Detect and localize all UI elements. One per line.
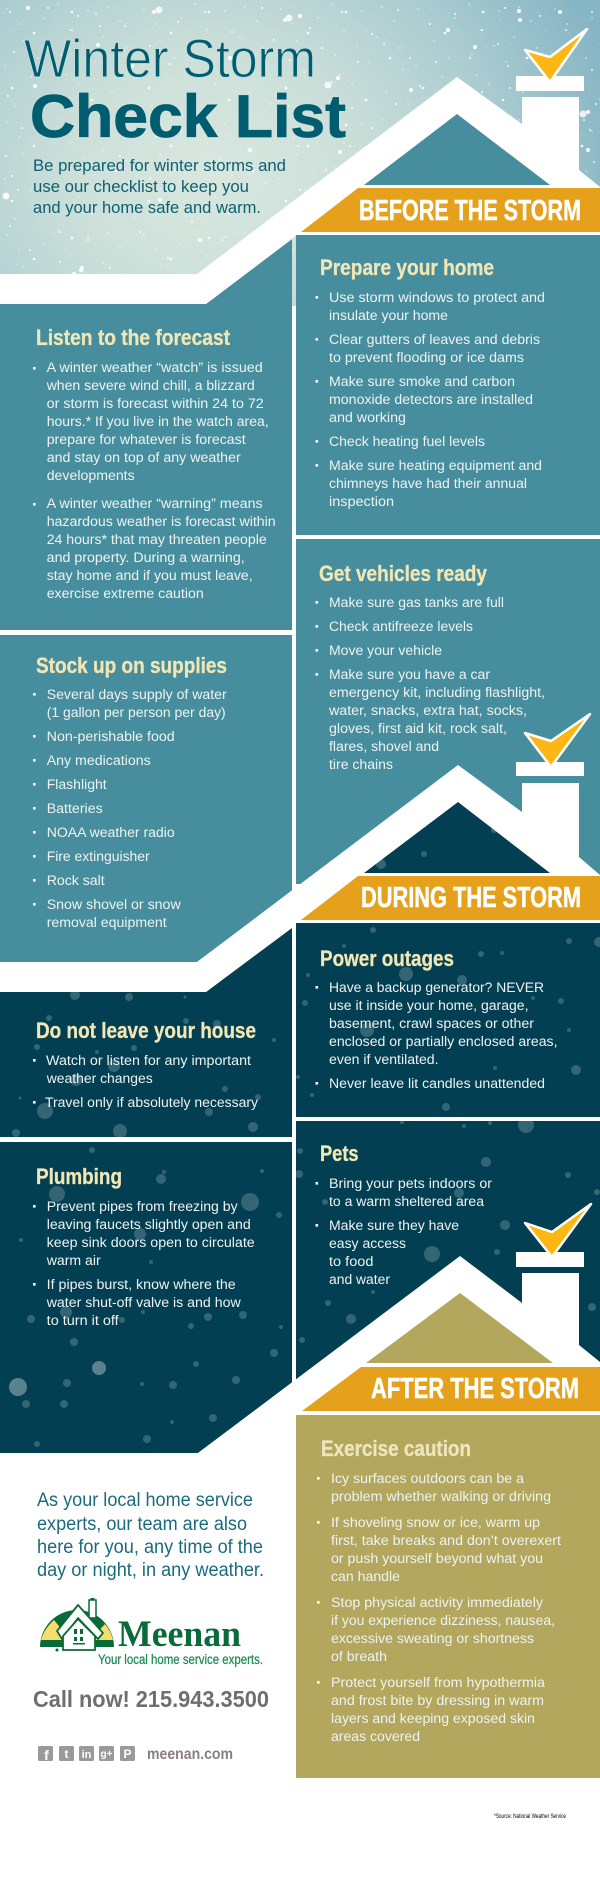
wordmark: Meenan: [118, 1614, 241, 1655]
heading: do not leave your house: Do not leave your house: [36, 1018, 256, 1043]
bullet list: supplies: removal equipment: [47, 915, 167, 931]
bullet list: home: insulate your home: [329, 308, 448, 324]
banner: during the storm: [301, 876, 600, 920]
bullet list: stay home: weather changes: [46, 1071, 153, 1087]
source footnote: *Source: National Weather Service: [494, 1813, 566, 1820]
bullet list: vehicles: Make sure you have a car: [329, 667, 490, 683]
chimney cap: [516, 76, 584, 91]
bullet list: vehicles: water, snacks, extra hat, socks,: [328, 703, 527, 719]
icon: check mark: [525, 29, 587, 82]
bullet list: vehicles: flares, shovel and: [329, 739, 439, 755]
panel: do not leave your house: [0, 928, 292, 1138]
social icons: [38, 1746, 135, 1763]
bullet list: forecast: [33, 360, 276, 602]
panel: power outages: [296, 923, 600, 1117]
bullet list: supplies: (1 gallon per person per day): [47, 705, 226, 721]
tagline: Your local home service experts.: [98, 1652, 263, 1667]
bullet list: supplies: Batteries: [47, 801, 103, 817]
heading: pets: Pets: [320, 1141, 359, 1166]
bullet list: caution: if you experience dizziness, nausea,: [331, 1613, 555, 1629]
bullet list: supplies: Non-perishable food: [47, 729, 175, 745]
snow dots: [12, 990, 276, 1138]
icon: check mark: [525, 714, 590, 767]
bullet list: home: inspection: [329, 494, 394, 510]
panel: plumbing: [0, 1142, 292, 1453]
bullet list: power: Never leave lit candles unattended: [329, 1076, 545, 1092]
bullet list: caution: [317, 1471, 561, 1745]
bullet list: home: monoxide detectors are installed: [329, 392, 533, 408]
bullet list: vehicles: emergency kit, including flashlight,: [329, 685, 545, 701]
bullet list: power: even if ventilated.: [329, 1052, 438, 1068]
bullet list: pets: to a warm sheltered area: [329, 1194, 484, 1210]
intro text: and your home safe and warm.: [33, 198, 261, 217]
bullet list: vehicles: Move your vehicle: [329, 643, 442, 659]
bullet list: plumbing: keep sink doors open to circulate: [47, 1235, 255, 1251]
bullet list: home: Clear gutters of leaves and debris: [329, 332, 540, 348]
bullet list: supplies: Snow shovel or snow: [47, 897, 181, 913]
bullet list: caution: excessive sweating or shortness: [331, 1631, 534, 1647]
icon: house and sun dome: [40, 1598, 114, 1652]
banner: before the storm: [301, 188, 600, 232]
bullet list: forecast: stay home and if you must leave,: [47, 568, 253, 584]
panel: prepare your home: [296, 235, 600, 535]
icon: twitter: t: [64, 1747, 68, 1761]
roof: after the storm: [0, 1204, 600, 1483]
bullet list: pets: easy access: [329, 1236, 406, 1252]
bullet list: pets: [316, 1176, 492, 1288]
bullet list: stay home: Travel only if absolutely necessary: [45, 1095, 259, 1111]
icon: check mark: [525, 1204, 591, 1257]
icon: facebook: f: [44, 1747, 49, 1763]
heading: get vehicles ready: Get vehicles ready: [319, 561, 488, 586]
bullet list: vehicles: Check antifreeze levels: [329, 619, 473, 635]
bullet list: power: use it inside your home, garage,: [329, 998, 528, 1014]
closing message: experts, our team are also: [37, 1514, 247, 1535]
heading: prepare your home: Prepare your home: [320, 255, 494, 280]
bullet list: home: chimneys have had their annual: [329, 476, 527, 492]
bullet list: home: [316, 290, 545, 510]
closing message: here for you, any time of the: [37, 1537, 263, 1558]
bullet list: power: [316, 980, 558, 1092]
bullet list: pets: to food: [329, 1254, 374, 1270]
heading: listen to the forecast: Listen to the forecast: [36, 325, 231, 350]
bullet list: caution: first, take breaks and don’t overexert: [331, 1533, 561, 1549]
bullet list: forecast: and stay on top of any weather: [47, 450, 241, 466]
bullet list: supplies: Rock salt: [47, 873, 105, 889]
bullet list: supplies: Several days supply of water: [47, 687, 227, 703]
bullet list: supplies: Fire extinguisher: [47, 849, 150, 865]
bullet list: caution: Stop physical activity immediately: [331, 1595, 544, 1611]
bullet list: home: to prevent flooding or ice dams: [329, 350, 524, 366]
bullet list: home: Make sure heating equipment and: [329, 458, 542, 474]
closing message: [37, 1490, 264, 1581]
bullet list: supplies: NOAA weather radio: [47, 825, 175, 841]
bullet list: pets: Bring your pets indoors or: [329, 1176, 492, 1192]
roof: during the storm: [0, 714, 600, 992]
icon: linkedin: in: [82, 1749, 92, 1761]
bullet list: home: Use storm windows to protect and: [329, 290, 545, 306]
bullet list: vehicles: Make sure gas tanks are full: [329, 595, 504, 611]
phone number: Call now! 215.943.3500: [33, 1686, 269, 1712]
bullet list: caution: Icy surfaces outdoors can be a: [331, 1471, 524, 1487]
bullet list: caution: layers and keeping exposed skin: [331, 1711, 535, 1727]
bullet list: forecast: and property. During a warning,: [47, 550, 245, 566]
heading: plumbing: Plumbing: [36, 1164, 122, 1189]
bullet list: vehicles: gloves, first aid kit, rock salt,: [329, 721, 507, 737]
snow dots: [295, 1117, 600, 1343]
roof: before the storm: [0, 29, 600, 304]
bullet list: plumbing: water shut-off valve is and how: [46, 1295, 241, 1311]
bullet list: forecast: exercise extreme caution: [47, 586, 204, 602]
heading: power outages: Power outages: [320, 946, 454, 971]
panel: stock up on supplies: [0, 635, 292, 962]
bullet list: home: Check heating fuel levels: [329, 434, 485, 450]
intro text: use our checklist to keep you: [33, 177, 249, 196]
bullet list: stay home: [33, 1053, 259, 1111]
winter sky background with snow: [0, 0, 600, 306]
chimney cap: [516, 1252, 584, 1267]
bullet list: home: Make sure smoke and carbon: [329, 374, 515, 390]
icon: google plus: g+: [101, 1749, 113, 1760]
snow dots: [296, 927, 600, 1111]
bullet list: forecast: hours.* If you live in the watch area,: [47, 414, 269, 430]
heading: stock up on supplies: Stock up on supplies: [36, 653, 227, 678]
panel: get vehicles ready: [296, 539, 600, 884]
panel: listen to the forecast: [0, 239, 292, 630]
bullet list: vehicles: [316, 595, 545, 773]
banner: after the storm: [302, 1367, 600, 1411]
chimney cap: [516, 762, 584, 776]
bullet list: plumbing: Prevent pipes from freezing by: [47, 1199, 239, 1215]
bullet list: plumbing: leaving faucets slightly open and: [47, 1217, 251, 1233]
bullet list: forecast: prepare for whatever is forecast: [47, 432, 246, 448]
bullet list: home: and working: [329, 410, 406, 426]
title: Winter Storm: [24, 29, 316, 89]
bullet list: power: Have a backup generator? NEVER: [329, 980, 544, 996]
attic triangle: [364, 802, 550, 873]
closing message: As your local home service: [37, 1490, 253, 1511]
snow dots: [9, 1147, 283, 1447]
bullet list: supplies: [33, 687, 227, 931]
bullet list: power: basement, crawl spaces or other: [329, 1016, 534, 1032]
bullet list: stay home: Watch or listen for any important: [46, 1053, 251, 1069]
bullet list: forecast: hazardous weather is forecast within: [47, 514, 276, 530]
website: meenan.com: [147, 1746, 233, 1763]
bullet list: forecast: or storm is forecast within 24 to 72: [47, 396, 264, 412]
bullet list: caution: If shoveling snow or ice, warm up: [331, 1515, 540, 1531]
title: Check List: [30, 83, 346, 150]
intro text: Be prepared for winter storms and: [33, 156, 286, 175]
bullet list: caution: can handle: [331, 1569, 400, 1585]
bullet list: caution: areas covered: [331, 1729, 420, 1745]
attic triangle: [364, 114, 550, 185]
logo: Meenan: [40, 1598, 263, 1667]
bullet list: plumbing: warm air: [46, 1253, 101, 1269]
intro text: [33, 156, 286, 217]
bullet list: pets: Make sure they have: [329, 1218, 459, 1234]
bullet list: caution: of breath: [331, 1649, 387, 1665]
bullet list: forecast: 24 hours* that may threaten people: [47, 532, 267, 548]
bullet list: plumbing: If pipes burst, know where the: [47, 1277, 236, 1293]
icon: pinterest: P: [123, 1747, 132, 1761]
bullet list: forecast: A winter weather “warning” means: [47, 496, 263, 512]
attic triangle: [366, 1293, 553, 1363]
bullet list: pets: and water: [329, 1272, 390, 1288]
bullet list: caution: problem whether walking or driving: [331, 1489, 551, 1505]
bullet list: supplies: Flashlight: [47, 777, 107, 793]
bullet list: plumbing: [33, 1199, 255, 1329]
panel: pets: [295, 1117, 600, 1381]
title: [24, 29, 346, 150]
bullet list: forecast: A winter weather “watch” is issued: [47, 360, 263, 376]
bullet list: caution: or push yourself beyond what you: [331, 1551, 543, 1567]
bullet list: forecast: developments: [47, 468, 135, 484]
closing message: day or night, in any weather.: [37, 1560, 264, 1581]
bullet list: caution: Protect yourself from hypothermia: [331, 1675, 545, 1691]
bullet list: supplies: Any medications: [47, 753, 151, 769]
bullet list: plumbing: to turn it off: [47, 1313, 119, 1329]
panel: exercise caution: [296, 1415, 600, 1778]
bullet list: caution: and frost bite by dressing in warm: [331, 1693, 544, 1709]
bullet list: power: enclosed or partially enclosed areas,: [329, 1034, 558, 1050]
bullet list: vehicles: tire chains: [329, 757, 393, 773]
heading: exercise caution: Exercise caution: [321, 1436, 471, 1461]
bullet list: forecast: when severe wind chill, a blizzard: [46, 378, 255, 394]
